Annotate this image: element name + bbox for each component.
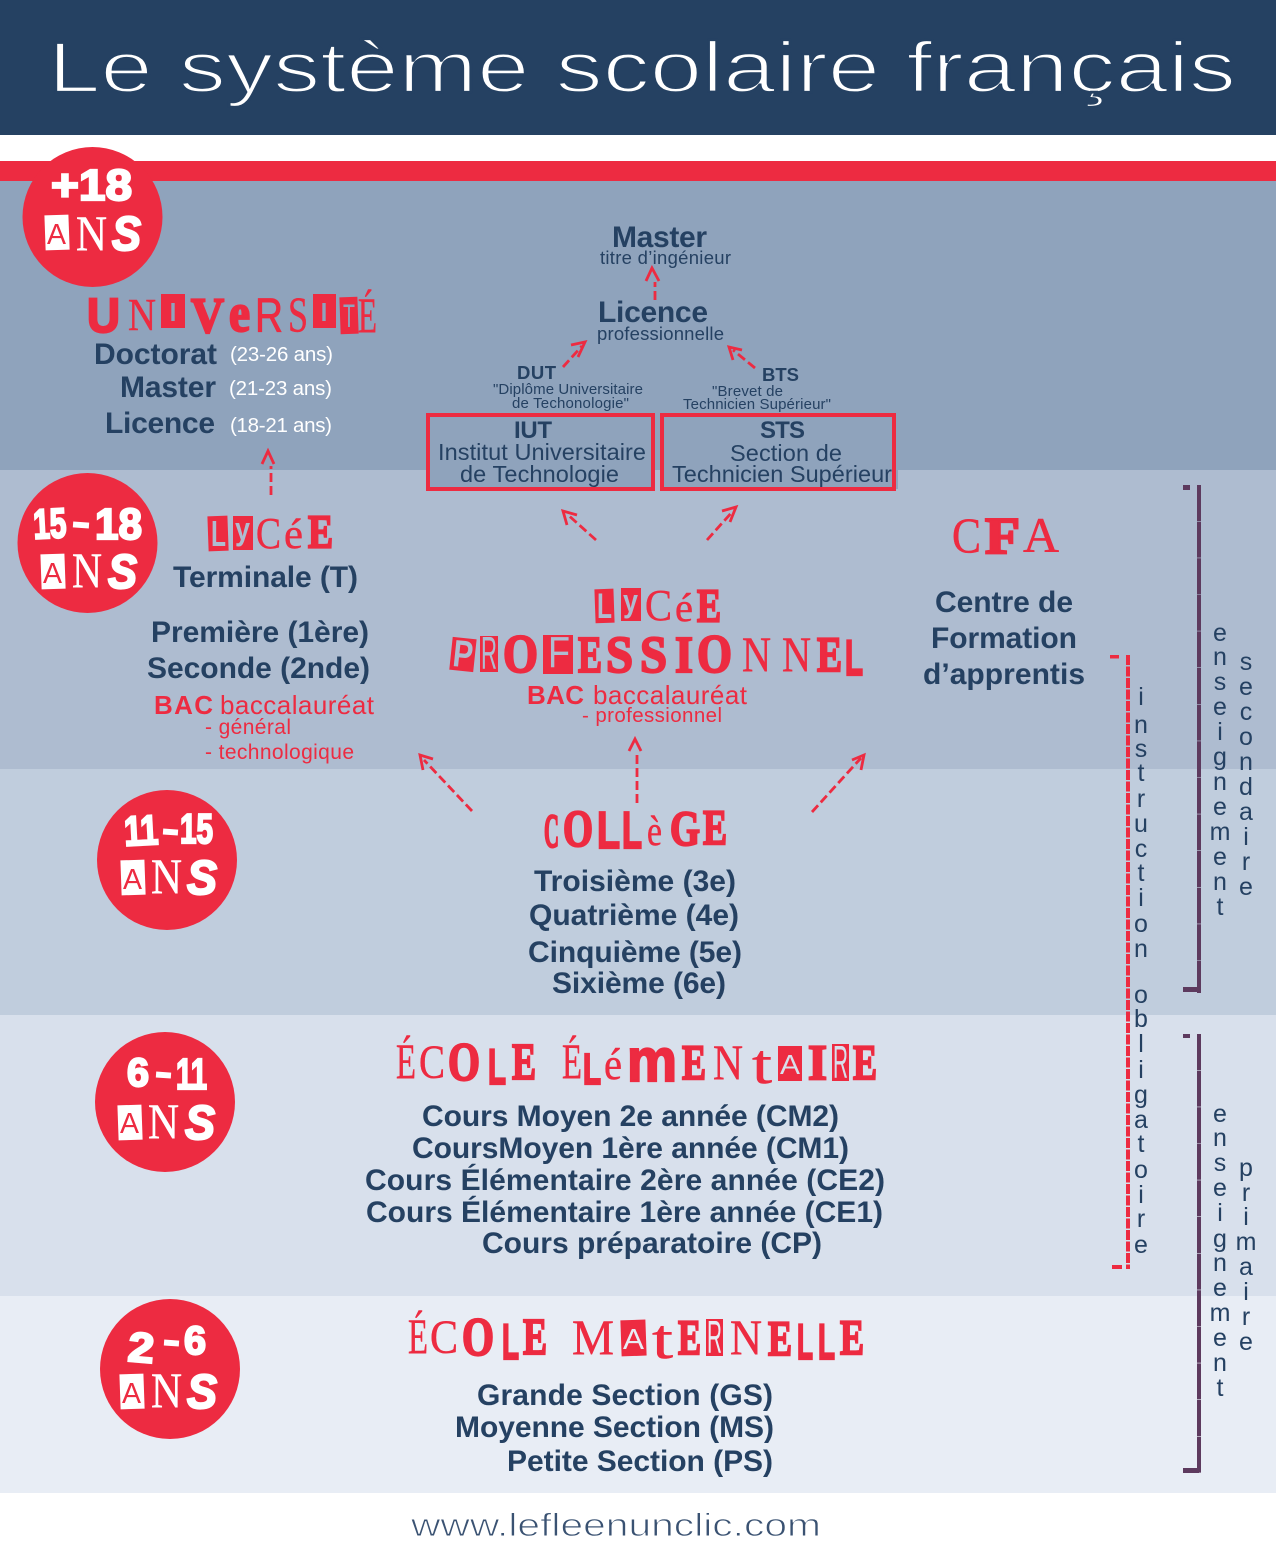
text: primaire: p [1239, 1154, 1253, 1182]
text: école élémentaire classes: Cours Élémentaire 1ère année (CE1) [366, 1195, 883, 1229]
panel: 2-6 band [0, 1296, 1276, 1493]
heading: Collège: G [670, 800, 700, 856]
heading: Lycée professionnel: S [606, 627, 633, 684]
panel: 11-15 band [0, 769, 1276, 1015]
text: école élémentaire classes: Cours Moyen 2e année (CM2) [422, 1100, 839, 1133]
bracket: instruction obligatoire [1110, 655, 1128, 1269]
heading: Lycée professionnel: L [597, 587, 612, 626]
text: Master titre d'ingénieur: titre d’ingénieur [600, 247, 731, 268]
text: lycée classes: Première (1ère) [151, 616, 369, 649]
badge: 2-6 ans [100, 1299, 240, 1439]
heading: Université: R [255, 290, 283, 343]
badge: 6-11 ans [95, 1032, 235, 1172]
text: Centre de Formation d'apprentis: Formation [931, 622, 1077, 655]
text: enseignement: n [1213, 643, 1227, 671]
text: BAC général technologique: BAC [154, 690, 213, 720]
badge: 6-11 ans: N [148, 1093, 179, 1149]
text: collège classes: Quatrième (4e) [529, 899, 739, 932]
heading: Lycée: C [256, 509, 281, 558]
text: secondaire: r [1242, 848, 1250, 876]
text: instruction obligatoire: s [1135, 735, 1147, 763]
bracket: enseignement secondaire [1183, 485, 1199, 993]
heading: École élémentaire: t [752, 1034, 773, 1096]
text: Licence professionnelle: professionnelle [597, 323, 724, 344]
heading: Lycée professionnel: O [697, 624, 732, 684]
heading: École élémentaire: A [780, 1049, 800, 1080]
badge: +18 ans: A [47, 219, 67, 251]
badge: 11-15 ans: 11 [123, 806, 159, 855]
text: primaire: i [1243, 1203, 1249, 1231]
text: BAC général technologique: baccalauréat [220, 690, 375, 720]
badge: 11-15 ans: S [187, 852, 217, 905]
heading: École maternelle: C [430, 1311, 458, 1364]
text: enseignement primaire left: e [1213, 1324, 1227, 1352]
heading: École élémentaire: N [713, 1034, 743, 1090]
text: collège classes: Cinquième (5e) [528, 936, 742, 969]
text: BAC professionnel [527, 680, 748, 727]
text: BAC général technologique [154, 690, 375, 764]
heading: Lycée professionnel: E [697, 580, 721, 633]
panel: 15-18 band [0, 470, 1276, 769]
text: secondaire: i [1243, 823, 1249, 851]
heading: École maternelle: R [707, 1311, 722, 1363]
heading: École maternelle: E [523, 1309, 547, 1366]
text: university degrees: (18-21 ans) [230, 414, 332, 437]
arrow: lycée pro to STS [707, 507, 736, 540]
text: enseignement primaire left: t [1217, 1374, 1224, 1402]
text: lycée classes: Seconde (2nde) [147, 652, 370, 685]
heading: Lycée: y [235, 511, 250, 547]
badge: 11-15 ans: N [151, 848, 182, 904]
text: secondaire: d [1239, 773, 1253, 801]
text: university degrees: (21-23 ans) [229, 377, 332, 400]
text: university degrees [94, 338, 333, 440]
badge: 15-18 ans: 15 [32, 499, 67, 548]
badge: 11-15 ans: A [123, 864, 143, 896]
text: BTS: BTS [762, 364, 799, 385]
text: university degrees: Licence [105, 407, 215, 440]
panel: 6-11 band [0, 1015, 1276, 1296]
header band [0, 0, 1276, 135]
text: instruction obligatoire: i [1138, 1056, 1144, 1084]
text: instruction obligatoire: t [1138, 1130, 1145, 1158]
text: instruction obligatoire: r [1137, 1205, 1145, 1233]
text: enseignement primaire left: g [1213, 1225, 1227, 1253]
text: BAC général technologique: - général [205, 716, 291, 739]
heading: Collège: è [647, 809, 662, 855]
text: collège classes: Sixième (6e) [552, 967, 726, 1000]
heading: École élémentaire: E [853, 1034, 877, 1090]
heading: Lycée: L [211, 513, 226, 554]
text: instruction obligatoire: n [1134, 935, 1148, 963]
heading: Lycée professionnel: N [742, 626, 771, 682]
box: IUT: IUT [514, 417, 552, 444]
heading: École élémentaire: E [682, 1034, 706, 1090]
text: enseignement: e [1213, 793, 1227, 821]
text: primaire: i [1243, 1278, 1249, 1306]
text: university degrees: Master [120, 371, 216, 404]
text: instruction obligatoire: u [1134, 810, 1148, 838]
arrow: lycée to université [262, 451, 274, 495]
text: instruction obligatoire: o [1134, 981, 1148, 1009]
heading: Lycée professionnel: I [675, 627, 693, 684]
badge: 11-15 ans [97, 790, 237, 930]
heading: Lycée [207, 506, 333, 559]
heading: Lycée: é [284, 512, 303, 558]
arrow: collège to lycée professionnel [629, 739, 641, 803]
text: Centre de Formation d'apprentis: d’apprentis [923, 658, 1085, 691]
heading: Collège [544, 799, 727, 860]
text: instruction obligatoire: r [1137, 785, 1145, 813]
heading: CFA: C [952, 507, 981, 563]
heading: École élémentaire [396, 1027, 877, 1096]
heading: École maternelle: E [840, 1309, 864, 1365]
heading: École élémentaire: é [604, 1040, 622, 1089]
text: university degrees: (23-26 ans) [230, 343, 333, 366]
heading: Lycée professionnel: R [481, 627, 497, 679]
text: école élémentaire classes: Cours préparatoire (CP) [482, 1227, 822, 1260]
heading: École maternelle: A [623, 1324, 645, 1356]
text: primaire: m [1236, 1228, 1256, 1256]
text: DUT: "Diplôme Universitaire [493, 381, 643, 398]
text: enseignement primaire left: e [1213, 1174, 1227, 1202]
text: instruction obligatoire: a [1134, 1106, 1148, 1134]
text: secondaire: c [1240, 698, 1252, 726]
text: école maternelle classes: Grande Section (GS) [477, 1379, 773, 1412]
heading: École maternelle: L [818, 1314, 835, 1370]
heading: Université: V [191, 287, 224, 343]
text: Centre de Formation d'apprentis [923, 586, 1085, 691]
text: BAC général technologique: - technologique [205, 741, 354, 764]
heading: Université: U [87, 290, 120, 343]
text: enseignement primaire left: e [1213, 1274, 1227, 1302]
text: primaire: e [1239, 1328, 1253, 1356]
badge: +18 ans: S [112, 208, 141, 261]
text: primaire: r [1242, 1303, 1250, 1331]
heading: École élémentaire: C [419, 1036, 445, 1089]
heading: Lycée professionnel: E [578, 627, 602, 684]
box: STS: STS [760, 417, 805, 444]
text: école élémentaire classes [365, 1100, 885, 1260]
text: école maternelle classes: Petite Section (PS) [507, 1445, 773, 1478]
heading: École élémentaire: R [833, 1036, 848, 1088]
text: enseignement primaire left: e [1213, 1100, 1227, 1128]
text: instruction obligatoire: e [1134, 1231, 1148, 1259]
heading: Lycée professionnel: O [503, 624, 538, 684]
heading: Collège: E [703, 799, 727, 855]
heading: Lycée professionnel: N [782, 626, 811, 682]
text: DUT [493, 362, 643, 412]
heading: Université: É [358, 287, 377, 343]
text: secondaire: e [1239, 673, 1253, 701]
arrow: licence to master [646, 268, 659, 300]
heading: Collège: C [544, 805, 559, 858]
text: enseignement: s [1214, 668, 1226, 696]
heading: Université: S [288, 286, 308, 342]
text: BAC professionnel: baccalauréat [593, 680, 748, 710]
text: secondaire: n [1239, 748, 1253, 776]
heading: CFA [952, 507, 1059, 565]
heading: Université: I [319, 297, 329, 327]
panel: +18 band [0, 181, 1276, 470]
box: IUT: Institut Universitaire [438, 439, 646, 465]
badge: 2-6 ans: A [122, 1378, 142, 1410]
badge: 6-11 ans: S [185, 1097, 215, 1150]
heading: École maternelle: É [408, 1308, 428, 1364]
heading: École maternelle: E [678, 1309, 701, 1365]
text: primaire: r [1242, 1179, 1250, 1207]
arrow: lycée pro to IUT [563, 511, 596, 540]
badge: 6-11 ans: A [120, 1108, 140, 1140]
bracket: enseignement primaire [1183, 1034, 1199, 1473]
text: enseignement: e [1213, 693, 1227, 721]
text: secondaire: e [1239, 873, 1253, 901]
heading: Université: I [168, 297, 178, 327]
heading: Université: N [128, 289, 156, 340]
heading: Université: T [343, 298, 355, 334]
heading: École élémentaire: L [488, 1039, 506, 1095]
arrow: BTS to licence [729, 347, 755, 368]
text: enseignement: t [1217, 893, 1224, 921]
box: STS [662, 415, 898, 489]
box: STS: Section de [730, 440, 842, 466]
badge: 15-18 ans: S [108, 546, 137, 599]
text: BTS: Technicien Supérieur" [683, 396, 831, 413]
heading: Lycée professionnel: y [623, 583, 638, 619]
badge: 6-11 ans: 6 [127, 1051, 149, 1095]
badge: 15-18 ans: 18 [95, 500, 142, 549]
text: enseignement: n [1213, 768, 1227, 796]
heading: École élémentaire: É [396, 1033, 416, 1089]
text: Master titre d'ingénieur [600, 221, 731, 268]
text: enseignement primaire left: m [1210, 1299, 1230, 1327]
badge: 11-15 ans: 15 [180, 805, 213, 852]
heading: Lycée professionnel: L [845, 630, 863, 686]
box: STS: Technicien Supérieur [672, 461, 892, 487]
text: enseignement: m [1210, 818, 1230, 846]
text: enseignement primaire left: n [1213, 1249, 1227, 1277]
heading: Lycée professionnel: P [451, 633, 475, 677]
heading: Lycée: E [308, 506, 333, 559]
arrow: DUT to licence [563, 342, 585, 367]
heading: École maternelle: L [502, 1314, 519, 1370]
heading: École maternelle: M [572, 1309, 614, 1365]
text: enseignement primaire left: s [1214, 1149, 1226, 1177]
heading: École élémentaire: L [583, 1045, 601, 1094]
footer url: www.lefleenunclic.com [410, 1507, 821, 1543]
text: instruction obligatoire: t [1138, 759, 1145, 787]
text: enseignement primaire left: n [1213, 1349, 1227, 1377]
badge: 15-18 ans [18, 473, 158, 613]
heading: École élémentaire: I [808, 1034, 827, 1090]
text: secondaire: o [1239, 723, 1253, 751]
heading: École élémentaire: E [512, 1034, 536, 1091]
text: Master titre d'ingénieur: Master [612, 221, 707, 254]
heading: École maternelle: N [730, 1309, 762, 1365]
heading: École élémentaire: É [562, 1033, 582, 1089]
heading: CFA: A [1023, 507, 1059, 563]
text: instruction obligatoire: o [1134, 1156, 1148, 1184]
badge: 15-18 ans: N [72, 542, 102, 598]
text: école élémentaire classes: CoursMoyen 1ère année (CM1) [412, 1132, 849, 1165]
text: instruction obligatoire: i [1138, 683, 1144, 711]
box: IUT: de Technologie [460, 461, 619, 487]
red stripe [0, 161, 1276, 181]
text: instruction obligatoire: i [1138, 884, 1144, 912]
heading: Lycée professionnel: C [645, 581, 672, 630]
heading: Collège: L [597, 802, 620, 860]
heading: École élémentaire: m [627, 1027, 677, 1094]
text: DUT: DUT [517, 362, 557, 383]
text: secondaire: s [1240, 648, 1252, 676]
text: BTS: "Brevet de [712, 383, 783, 400]
arrow: collège to CFA [812, 755, 864, 812]
text: primaire: a [1239, 1253, 1253, 1281]
text: école maternelle classes: Moyenne Section (MS) [455, 1411, 774, 1444]
badge: 2-6 ans: N [151, 1362, 182, 1418]
text: BAC professionnel: - professionnel [582, 704, 722, 727]
text: enseignement: g [1213, 743, 1227, 771]
badge: +18 ans: N [76, 205, 107, 261]
heading: Lycée professionnel: F [548, 628, 570, 677]
title: Le système scolaire français [48, 29, 1236, 108]
text: enseignement: e [1213, 843, 1227, 871]
badge: 2-6 ans: S [187, 1366, 217, 1419]
badge: 2-6 ans: 2 [126, 1323, 156, 1372]
text: enseignement primaire left: n [1213, 1124, 1227, 1152]
text: instruction obligatoire: t [1138, 859, 1145, 887]
text: enseignement: e [1213, 619, 1227, 647]
text: instruction obligatoire: i [1138, 1181, 1144, 1209]
heading: Lycée professionnel [449, 580, 863, 686]
text: Licence professionnelle [597, 296, 724, 344]
text: lycée classes: Terminale (T) [173, 561, 358, 594]
heading: École maternelle [408, 1307, 864, 1371]
badge: 2-6 ans: 6 [184, 1319, 206, 1363]
heading: Université: e [229, 283, 250, 343]
text: BAC professionnel: BAC [527, 680, 584, 710]
box: IUT [428, 415, 653, 489]
badge: 15-18 ans: A [43, 558, 63, 590]
text: instruction obligatoire: g [1134, 1081, 1148, 1109]
text: instruction obligatoire: o [1134, 910, 1148, 938]
text: instruction obligatoire: b [1134, 1005, 1148, 1033]
badge: +18 ans [22, 147, 162, 287]
badge: 6-11 ans: 11 [176, 1050, 207, 1099]
heading: Lycée professionnel: é [675, 585, 693, 630]
heading: École maternelle: L [797, 1314, 813, 1370]
text: collège classes: Troisième (3e) [534, 865, 736, 898]
arrow: collège to lycée [420, 755, 472, 811]
text: Centre de Formation d'apprentis: Centre de [935, 586, 1073, 619]
heading: École maternelle: E [768, 1310, 792, 1366]
text: enseignement: n [1213, 868, 1227, 896]
heading: Collège: L [622, 802, 642, 860]
text: Licence professionnelle: Licence [598, 296, 708, 329]
text: lycée classes [147, 561, 370, 685]
badge: +18 ans: +18 [51, 161, 132, 210]
text: instruction obligatoire: n [1134, 711, 1148, 739]
heading: École maternelle: t [652, 1309, 674, 1371]
text: instruction obligatoire: l [1138, 1030, 1144, 1058]
text: DUT: de Techonologie" [512, 395, 629, 412]
heading: École maternelle: O [462, 1307, 494, 1367]
text: secondaire: a [1239, 798, 1253, 826]
heading: Collège: O [563, 801, 593, 858]
text: enseignement: i [1217, 718, 1223, 746]
text: école élémentaire classes: Cours Élémentaire 2ère année (CE2) [365, 1163, 885, 1197]
text: enseignement primaire left: i [1217, 1199, 1223, 1227]
text: university degrees: Doctorat [94, 338, 217, 371]
heading: Lycée professionnel: E [817, 626, 842, 682]
text: instruction obligatoire: c [1135, 835, 1147, 863]
heading: CFA: F [985, 508, 1020, 565]
text: école maternelle classes [455, 1379, 774, 1478]
text: collège classes [528, 865, 742, 1000]
heading: École élémentaire: O [448, 1032, 480, 1092]
heading: Université [87, 283, 377, 343]
text: BTS [683, 364, 831, 413]
heading: Lycée professionnel: S [640, 627, 667, 684]
